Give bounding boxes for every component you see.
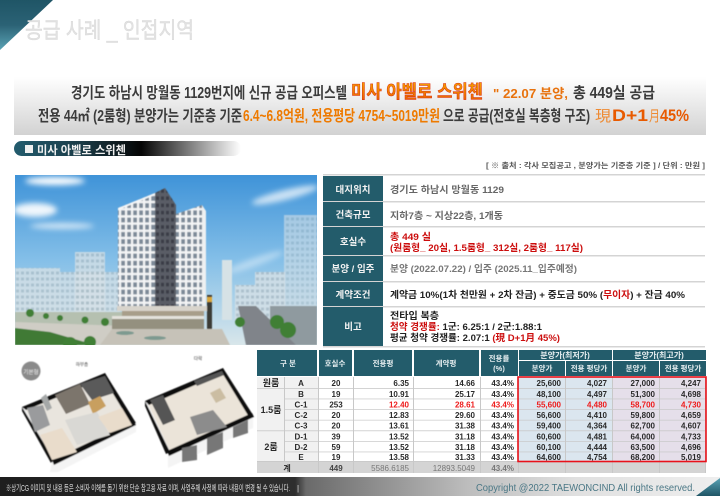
table body: 27,000 <box>631 379 656 388</box>
table body: D-2 <box>295 443 308 452</box>
table body: 원룸 <box>263 377 279 388</box>
price table: (%) <box>493 364 505 373</box>
table body: 31.18 <box>455 432 476 442</box>
table body: 14.66 <box>455 379 476 388</box>
price table: 분양가(최고가) <box>634 350 684 360</box>
table body: 4,247 <box>681 379 702 388</box>
row: remarks: 청약 경쟁률: 1군: 6.25:1 / 2군:1.88:1 <box>390 321 543 333</box>
type column <box>257 377 284 461</box>
banner line 1 <box>71 82 655 102</box>
table body: 31.33 <box>455 453 476 462</box>
floor plans <box>22 355 254 472</box>
table body: 4,696 <box>681 443 702 452</box>
header <box>257 350 706 376</box>
table body: 계 <box>283 463 291 473</box>
section heading bar: 미사 아벨로 스위첸 <box>37 144 126 157</box>
road <box>238 306 296 345</box>
table body: 48,100 <box>537 390 562 399</box>
table body: 63,500 <box>631 443 656 452</box>
table body: 43.4% <box>491 379 514 388</box>
table body: E <box>298 453 304 462</box>
row: dates <box>323 256 577 281</box>
row: site: 경기도 하남시 망월동 1129 <box>390 184 504 196</box>
table body: 68,200 <box>631 453 656 462</box>
title: 공급 사례 _ 인접지역 <box>25 18 194 43</box>
corner triangle <box>0 0 53 50</box>
price table: 계약평 <box>436 358 456 368</box>
table body: 29.60 <box>455 411 476 420</box>
price table: 전용평 <box>373 358 393 368</box>
plan: upper floor <box>145 368 254 468</box>
row: remarks: 평균 청약 경쟁률: 2.07:1 (現 D+1月 45%) <box>390 332 560 344</box>
table body: 4,607 <box>681 422 702 430</box>
banner line 1: 미사 아벨로 스위첸 <box>351 82 483 102</box>
type badge <box>22 362 40 380</box>
banner line 2: 45% <box>660 106 689 125</box>
table body: 43.4% <box>491 400 514 410</box>
banner line 1: 총 449실 공급 <box>573 84 655 102</box>
table body: 4,730 <box>681 400 702 410</box>
source note: [ ※ 출처 : 각사 모집공고 , 분양가는 기준층 기준 ] / 단위 : 만원 ] <box>486 160 706 170</box>
price table: 전용 평당가 <box>665 363 701 373</box>
table body: 5,019 <box>681 453 702 462</box>
table body: 13.52 <box>389 443 410 452</box>
table body: 31.18 <box>455 443 476 452</box>
row: remarks: 비고 <box>344 321 362 333</box>
photo: building rendering <box>13 175 319 351</box>
banner line 1: " 22.07 분양, <box>493 86 568 101</box>
table body: 25.17 <box>455 390 476 399</box>
table body: 43.4% <box>491 411 514 420</box>
table body: 59 <box>332 443 341 452</box>
table body: 43.4% <box>491 422 514 430</box>
table body: 20 <box>332 379 341 388</box>
right wing <box>176 205 202 306</box>
price table: 전용률 <box>489 353 509 363</box>
footer bar <box>0 477 720 496</box>
banner line 2: 6.4~6.8억원, 전용평당 4754~5019만원 <box>243 107 440 125</box>
table body: 43.4% <box>491 432 514 442</box>
main tower light face <box>118 193 155 307</box>
table body: 12.83 <box>389 411 410 420</box>
row: remarks: 전타입 복층 <box>390 310 439 322</box>
row: dates: 분양 / 입주 <box>332 263 375 275</box>
table body: 39 <box>332 432 341 442</box>
table body: 20 <box>332 411 341 420</box>
row: contract: 계약금 10%(1차 천만원 + 2차 잔금) + 중도금 50% ( 무이자) + 잔금 40% <box>390 289 686 301</box>
price table: 전용 평당가 <box>571 363 607 373</box>
table body: 4,027 <box>587 379 608 388</box>
row: site <box>323 176 504 201</box>
table body: 12.40 <box>389 400 410 410</box>
section heading bar <box>14 141 241 157</box>
plan: lower floor <box>22 373 136 472</box>
table body: 253 <box>329 400 343 410</box>
row: contract <box>323 282 686 306</box>
table body: 43.4% <box>491 443 514 452</box>
table body: 62,700 <box>631 422 656 430</box>
table body: 4,754 <box>587 453 608 462</box>
price table <box>257 350 706 473</box>
row: scale <box>323 202 503 226</box>
table body <box>261 377 702 473</box>
copyright: Copyright @2022 TAEWONCIND All rights reserved. <box>476 483 695 494</box>
row: remarks <box>323 307 560 346</box>
table body: 59,800 <box>631 411 656 420</box>
banner line 2: D+1 <box>612 106 648 125</box>
table body: C-2 <box>295 411 308 420</box>
table body: 4,698 <box>681 390 702 399</box>
row: contract: 계약조건 <box>336 289 370 301</box>
floor plans: 다락 <box>194 355 202 362</box>
footer disclaimer: ※상기CG 이미지 및 내용 등은 소비자 이해를 돕기 위한 단순 참고용 자료 이며, 사업주체 사정에 따라 내용이 변경 될 수 있습니다. <box>6 483 290 493</box>
table body: 4,481 <box>587 432 608 442</box>
banner line 2: 으로 공급(전호실 복층형 구조) <box>443 107 590 125</box>
row: units: 호실수 <box>340 236 366 248</box>
footer divider mark: | <box>297 484 299 493</box>
table body: 19 <box>332 390 341 399</box>
table body: 60,100 <box>537 443 562 452</box>
footer corner triangle <box>696 478 720 496</box>
table body: 19 <box>332 453 341 462</box>
table body: A <box>298 379 304 388</box>
table body: 25,600 <box>537 379 562 388</box>
row: scale: 지하7층 ~ 지상22층, 1개동 <box>390 210 503 222</box>
row: units <box>323 227 583 255</box>
summary banner <box>14 77 706 135</box>
price table: 분양가(최저가) <box>540 350 590 360</box>
row: site: 대지위치 <box>336 184 370 196</box>
table body: 13.61 <box>389 422 410 430</box>
table body: C-3 <box>295 422 308 430</box>
table body: 2룸 <box>264 442 278 452</box>
main tower dark face <box>155 188 176 308</box>
table body: 5586.6185 <box>371 464 410 473</box>
price table: 호실수 <box>325 358 345 368</box>
banner line 2: 月 <box>649 108 660 125</box>
row: units: (원룸형_ 20실, 1.5룸형_ 312실, 2룸형_ 117실) <box>390 242 583 254</box>
price table: 분양가 <box>626 363 646 373</box>
row: scale: 건축규모 <box>336 210 371 221</box>
price table: 구 분 <box>280 359 296 368</box>
table body: 43.4% <box>491 453 514 462</box>
type badge: 기본형 <box>23 368 39 376</box>
table body: 4,497 <box>587 390 608 399</box>
table body: 13.58 <box>389 453 410 462</box>
table body: 449 <box>329 464 343 473</box>
price cell shading <box>519 377 612 461</box>
table body: 28.61 <box>455 400 476 410</box>
table body: 43.4% <box>491 390 514 399</box>
table body: 4,480 <box>587 400 608 410</box>
table body: 4,733 <box>681 432 702 442</box>
table body: 4,659 <box>681 411 702 420</box>
table body: 6.35 <box>393 379 410 388</box>
plan labels: 하부층 <box>76 361 88 368</box>
table body: 1.5룸 <box>261 405 281 415</box>
info table <box>323 174 705 348</box>
table body: 64,600 <box>537 453 562 462</box>
table body: D-1 <box>295 432 308 442</box>
table body: 4,444 <box>587 443 608 452</box>
podium <box>117 306 207 311</box>
banner line 2: 現 <box>595 108 611 125</box>
row: dates: 분양 (2022.07.22) / 입주 (2025.11_입주예정) <box>390 263 577 275</box>
table body: 31.38 <box>455 422 476 430</box>
table body: 20 <box>332 422 341 430</box>
table body: 60,600 <box>537 432 562 442</box>
table body: 10.91 <box>389 390 410 399</box>
red highlight box <box>518 377 706 462</box>
table body: 55,600 <box>537 400 562 410</box>
table body: 43.4% <box>491 464 514 473</box>
row: units: 총 449 실 <box>390 231 431 243</box>
price table: 분양가 <box>532 363 552 373</box>
table body: B <box>298 390 304 399</box>
table body: 12893.5049 <box>433 464 476 473</box>
table body: 13.52 <box>389 432 410 442</box>
table body: 58,700 <box>631 400 656 410</box>
table body: 4,410 <box>587 411 608 420</box>
table body: 4,364 <box>587 422 608 430</box>
table body: 64,000 <box>631 432 656 442</box>
banner line 2: 전용 44㎡ (2룸형) 분양가는 기준층 기준 <box>38 106 242 125</box>
banner line 1: 경기도 하남시 망월동 1129번지에 신규 공급 오피스텔 <box>71 84 347 102</box>
banner line 2 <box>38 106 689 125</box>
table body: 51,300 <box>631 390 656 399</box>
table body: 56,600 <box>537 411 562 420</box>
table body: C-1 <box>295 400 308 410</box>
table body: 59,400 <box>537 422 562 430</box>
